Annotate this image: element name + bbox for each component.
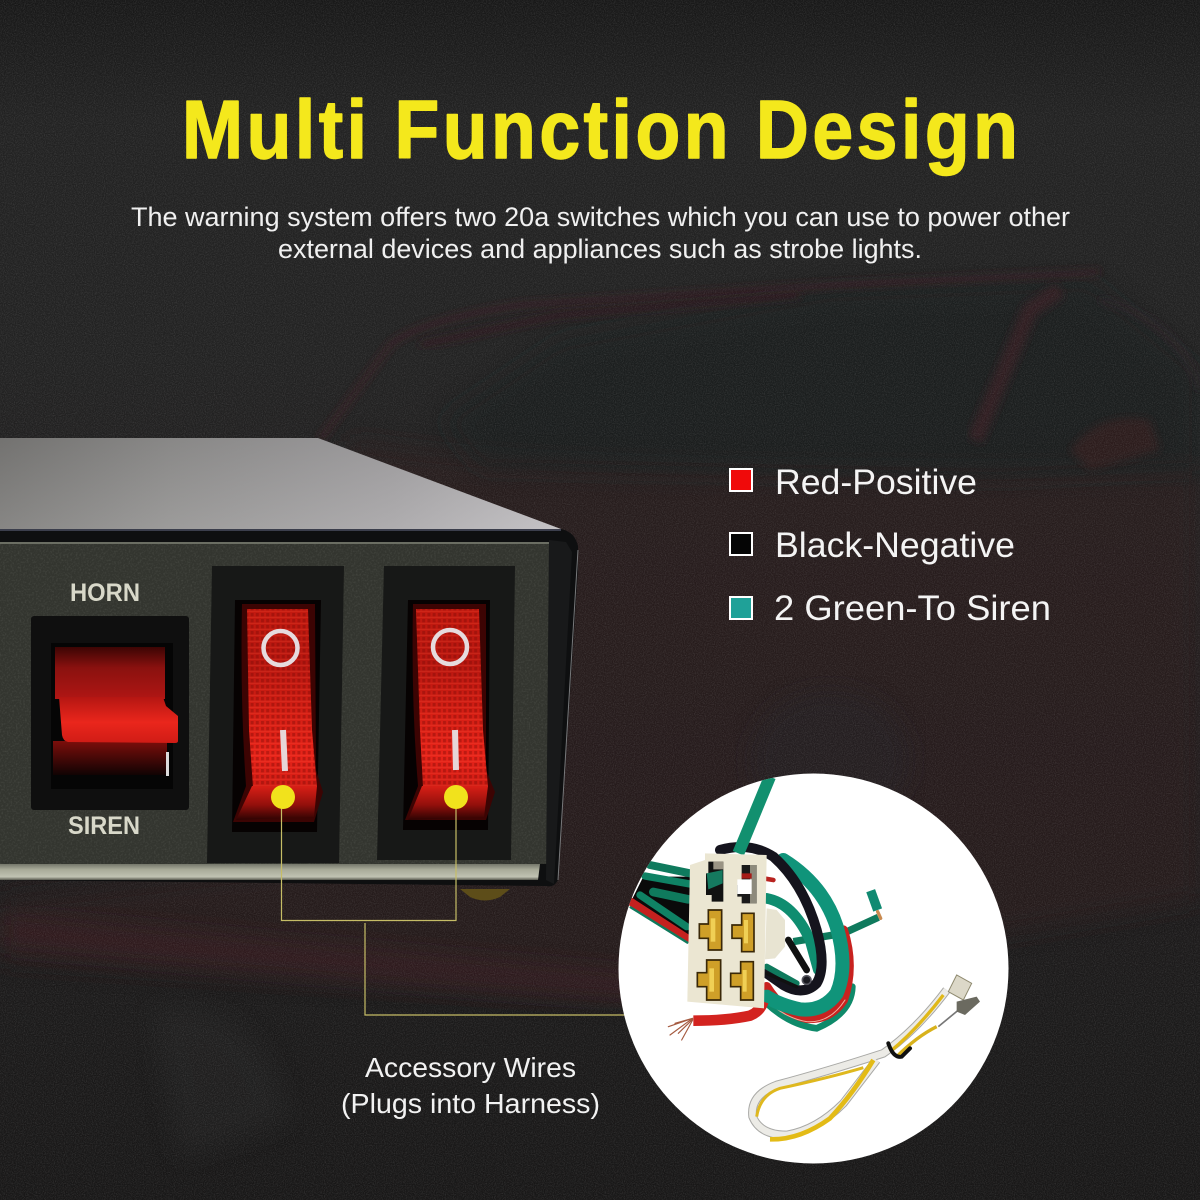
jumper wire bbox=[752, 990, 962, 1139]
accessory wires label: Accessory Wires bbox=[365, 1052, 576, 1083]
harness wires bbox=[630, 777, 881, 1040]
legend: black negative: Black-Negative bbox=[775, 526, 1015, 565]
box front face bbox=[0, 542, 549, 864]
bottom silver strip bbox=[0, 864, 540, 880]
label: HORN: HORN bbox=[70, 579, 140, 607]
legend: green to siren: 2 Green-To Siren bbox=[774, 589, 1051, 628]
right side flange bbox=[546, 540, 572, 884]
rocker switch 2 bbox=[377, 566, 515, 860]
wire loop: black bbox=[720, 847, 822, 990]
accessory wires photo circle bbox=[618, 774, 1008, 1164]
gold screw bbox=[460, 889, 510, 900]
terminals bbox=[948, 975, 972, 1000]
callout dot: switch 2 bbox=[444, 785, 468, 809]
right side wires bbox=[793, 917, 878, 942]
wire loop: red bbox=[767, 930, 849, 1018]
legend: red positive: Red-Positive bbox=[775, 463, 977, 502]
description text: external devices and appliances such as strobe lights. bbox=[278, 234, 922, 264]
stripped red wire bbox=[693, 1002, 763, 1021]
title: Multi Function Design bbox=[182, 83, 1021, 176]
accessory wires label: (Plugs into Harness) bbox=[341, 1088, 600, 1119]
left wire bundle bbox=[632, 876, 690, 934]
rocker switch 1 bbox=[207, 566, 344, 863]
accessory wires label bbox=[341, 1052, 600, 1119]
wire loop: main green bbox=[767, 860, 842, 1010]
connector lines from switches to accessory wires bbox=[282, 797, 625, 1015]
legend bbox=[730, 463, 1051, 628]
wire loop: outer green bbox=[767, 987, 852, 1028]
description text bbox=[131, 202, 1070, 264]
label: SIREN: SIREN bbox=[68, 812, 140, 840]
box front lip and frame bbox=[0, 529, 578, 886]
connector plug bbox=[687, 853, 785, 1008]
horn siren rocker switch bbox=[31, 616, 189, 810]
description text: The warning system offers two 20a switches which you can use to power other bbox=[131, 202, 1070, 232]
callout dot: switch 1 bbox=[271, 785, 295, 809]
box top panel bbox=[0, 438, 561, 530]
device: control box bbox=[0, 438, 578, 900]
